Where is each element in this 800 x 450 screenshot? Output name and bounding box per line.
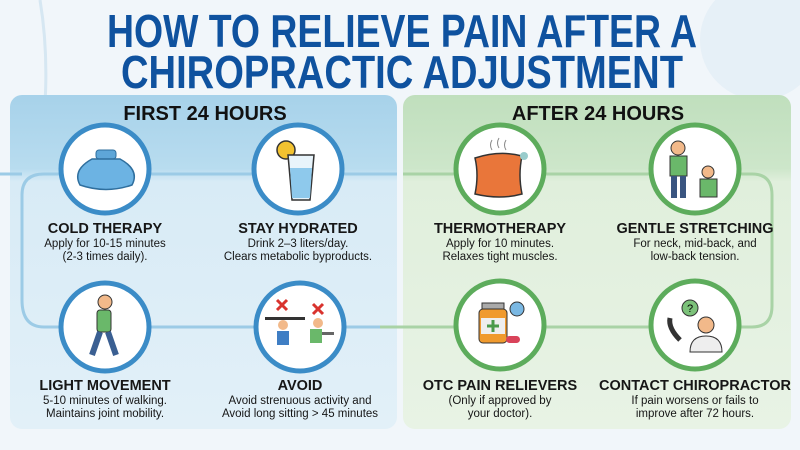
item: gentle stretching: GENTLE STRETCHING: [616, 221, 774, 237]
item: otc pain relievers: OTC PAIN RELIEVERS: [423, 378, 578, 394]
icon: walking person: [92, 295, 116, 355]
item: stay hydrated: [224, 125, 372, 263]
item: light movement: [39, 283, 171, 420]
item: contact chiropractor: If pain worsens or fails to: [631, 395, 759, 407]
icon: phone and doctor: [670, 300, 722, 352]
item: contact chiropractor: improve after 72 hours.: [636, 408, 754, 420]
heading: after 24 hours: AFTER 24 HOURS: [512, 103, 684, 125]
item: stay hydrated: STAY HYDRATED: [238, 221, 358, 237]
item: contact chiropractor: [599, 281, 792, 420]
item: thermotherapy: THERMOTHERAPY: [434, 221, 566, 237]
item: avoid: Avoid long sitting > 45 minutes: [222, 408, 378, 420]
background decoration: [38, 0, 800, 300]
item: light movement: LIGHT MOVEMENT: [39, 378, 171, 394]
item: stay hydrated: Drink 2–3 liters/day.: [248, 238, 348, 250]
connector lines: [0, 174, 772, 327]
heading: first 24 hours: FIRST 24 HOURS: [123, 103, 287, 125]
icon: ice bag: [78, 150, 134, 190]
item: otc pain relievers: (Only if approved by: [449, 395, 552, 407]
item: light movement: 5-10 minutes of walking.: [43, 395, 167, 407]
icon: heat pad: [475, 138, 528, 197]
item: gentle stretching: For neck, mid-back, and: [633, 238, 757, 250]
item: otc pain relievers: your doctor).: [468, 408, 532, 420]
item: cold therapy: COLD THERAPY: [48, 221, 163, 237]
item: thermotherapy: Relaxes tight muscles.: [442, 251, 558, 263]
item: light movement: Maintains joint mobility.: [46, 408, 164, 420]
item: thermotherapy: [434, 125, 566, 263]
item: stay hydrated: Clears metabolic byproducts.: [224, 251, 372, 263]
title: [107, 5, 697, 98]
icon: glass of water: [277, 141, 314, 200]
item: cold therapy: (2-3 times daily).: [62, 251, 148, 263]
item: thermotherapy: Apply for 10 minutes.: [446, 238, 554, 250]
item: gentle stretching: low-back tension.: [651, 251, 739, 263]
item: avoid: [222, 283, 378, 420]
item: avoid: AVOID: [278, 378, 322, 394]
icon: phone and doctor: ?: [687, 303, 693, 315]
item: avoid: Avoid strenuous activity and: [229, 395, 371, 407]
item: contact chiropractor: CONTACT CHIROPRACTOR: [599, 378, 792, 394]
item: cold therapy: [44, 125, 166, 263]
item: cold therapy: Apply for 10-15 minutes: [44, 238, 166, 250]
icon: stretching people: [670, 141, 717, 198]
icon: pill bottle: [479, 302, 524, 343]
item: gentle stretching: [616, 125, 774, 263]
item: otc pain relievers: [423, 281, 578, 420]
title: CHIROPRACTIC ADJUSTMENT: [121, 46, 683, 98]
icon: weightlifter and sitting: [265, 300, 334, 345]
